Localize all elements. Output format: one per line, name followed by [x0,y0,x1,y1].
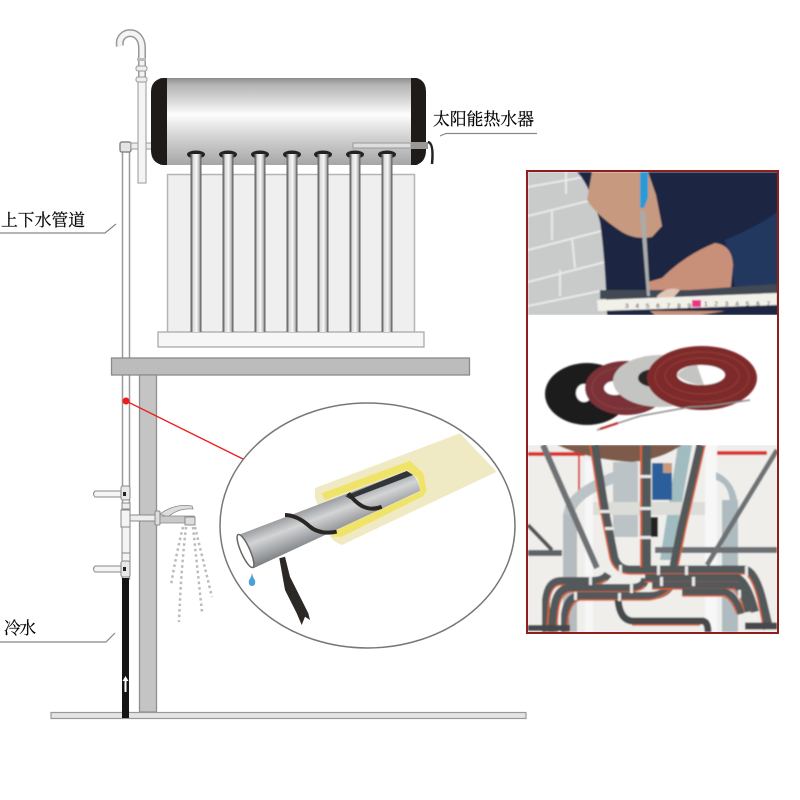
steel pipe [238,471,420,568]
label: water supply pipe [0,211,116,233]
yellow insulation cut [322,461,427,537]
photo: pipes with heating cable in a factory [528,445,777,632]
cable tail [279,557,310,625]
wall column [140,375,156,712]
heating cable on tank [353,142,432,164]
label: solar water heater: 太阳能热水器 [433,110,534,129]
vertical water pipe [120,142,152,579]
solar water tank [151,78,426,165]
panel base [158,332,424,347]
shelf [112,358,470,375]
collector panel [168,174,414,332]
scissors [640,172,648,208]
insulation sleeve [315,433,497,545]
lower valves and fittings [94,486,130,577]
photo: cutting cable with scissors [528,172,793,315]
hand holding cable [648,242,734,292]
vent pipe with hook [120,33,147,183]
label: water supply pipe: 上下水管道 [1,211,85,230]
red leader line [122,398,243,459]
heating cable spiral [285,515,337,533]
photo: cutting cable with scissors: 1 2 3 4 5 6 7 8 9 [704,301,793,308]
photo: cutting cable with scissors: 3 4 5 6 7 8 9 [625,303,694,310]
inset circle: pipe cross section [220,403,515,648]
faucet [130,505,195,525]
ground slab [51,712,526,718]
photo frame [527,171,778,633]
vacuum tubes [187,150,396,332]
label: cold water: 冷水 [4,619,36,638]
tape measure [597,293,777,311]
water drop [249,573,255,586]
cold water pipe with arrow [122,578,129,718]
water spray [171,527,212,622]
photo: coils of heating cable [545,346,757,430]
hand holding scissors [587,172,662,238]
label: cold water [0,619,115,642]
